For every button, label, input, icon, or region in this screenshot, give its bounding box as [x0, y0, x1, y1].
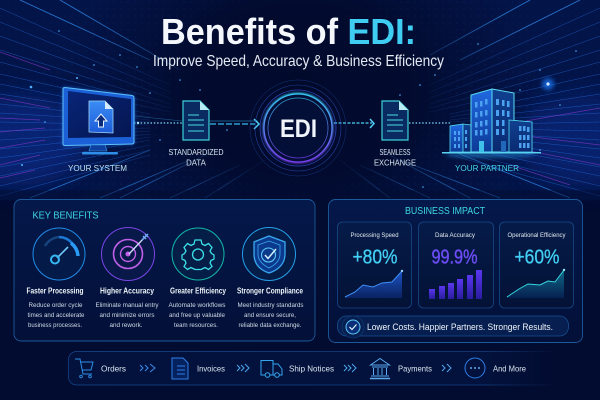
card label: Processing Speed — [350, 232, 399, 239]
EDI label: EDI — [280, 115, 317, 143]
icon: cart wheels — [80, 375, 91, 378]
title: Faster Processing — [26, 286, 84, 296]
description: Automate workflows — [168, 302, 226, 309]
benefit: faster processing — [26, 228, 85, 329]
label: your partner: YOUR PARTNER — [455, 163, 519, 173]
card: operational efficiency — [500, 222, 574, 308]
description: and minimize errors — [100, 312, 155, 319]
benefit: greater efficiency — [168, 228, 227, 329]
description: team resources. — [174, 322, 218, 329]
card: data accuracy — [418, 222, 494, 308]
icon: your system monitor — [63, 87, 134, 154]
label: invoices: Invoices — [197, 364, 225, 374]
EDI hub — [250, 80, 346, 176]
icon: target — [102, 228, 154, 280]
document types bar — [68, 352, 558, 385]
panel: key benefits — [14, 200, 315, 341]
description: and rework. — [110, 322, 143, 329]
label: seamless exchange: SEAMLESS — [380, 148, 410, 157]
data flow arrows — [134, 116, 450, 129]
label: seamless exchange: EXCHANGE — [374, 158, 416, 168]
description — [28, 302, 85, 329]
label: ship notices: Ship Notices — [289, 364, 334, 374]
benefit: stronger compliance — [237, 228, 304, 329]
description — [168, 302, 226, 329]
heading: business impact: BUSINESS IMPACT — [405, 206, 485, 217]
icon: invoice — [172, 358, 188, 379]
icon: bank — [370, 358, 390, 378]
label: payments: Payments — [398, 364, 432, 374]
panel: business impact — [328, 200, 582, 342]
description: Meet industry standards — [238, 302, 304, 309]
description: business processes. — [28, 322, 82, 329]
label: orders: Orders — [101, 364, 126, 374]
description: and free up valuable — [169, 312, 225, 319]
label: your system: YOUR SYSTEM — [68, 163, 127, 173]
description: Reduce order cycle — [28, 302, 83, 309]
icon: partner buildings — [442, 89, 541, 158]
label: standardized data — [168, 148, 224, 168]
description: and ensure secure, — [244, 312, 296, 319]
line chart — [507, 269, 565, 298]
title: Higher Accuracy — [100, 286, 155, 296]
area chart — [345, 270, 403, 298]
bar chart — [429, 270, 482, 299]
title: Benefits of EDI: — [161, 11, 416, 52]
metric: +80% — [352, 246, 398, 268]
label: standardized data: STANDARDIZED — [168, 148, 224, 157]
subtitle: Improve Speed, Accuracy & Business Efficiency — [153, 53, 444, 70]
icon: standardized data document — [183, 101, 209, 140]
icon: more — [465, 358, 485, 378]
card: processing speed — [338, 222, 412, 308]
icon: cart — [75, 359, 93, 374]
title: Greater Efficiency — [170, 286, 227, 296]
metric: 99.9% — [432, 246, 478, 268]
icon: shield — [242, 228, 296, 280]
arrow: chevrons — [140, 364, 155, 372]
description — [238, 302, 304, 329]
title: Stronger Compliance — [237, 286, 304, 296]
description — [96, 302, 159, 329]
callout: results — [338, 316, 568, 338]
description: reliable data exchange. — [238, 322, 302, 329]
description: Eliminate manual entry — [96, 302, 159, 309]
description: times and accelerate — [28, 312, 85, 319]
label: and more: And More — [493, 364, 526, 374]
icon: speedometer — [33, 228, 85, 280]
label: standardized data: DATA — [186, 158, 207, 168]
arrow: chevrons — [237, 364, 249, 372]
arrow: chevrons — [344, 364, 356, 372]
card label: Data Accuracy — [435, 232, 476, 239]
benefit: higher accuracy — [96, 228, 159, 329]
callout text: Lower Costs. Happier Partners. Stronger Results. — [367, 322, 553, 332]
label: seamless exchange — [374, 148, 416, 168]
metric: +60% — [514, 246, 560, 268]
arrow: chevrons — [442, 364, 451, 372]
icon: truck — [261, 360, 282, 377]
icon: seamless exchange document — [382, 101, 408, 140]
icon: gear — [172, 228, 224, 280]
heading: key benefits: KEY BENEFITS — [32, 210, 99, 222]
card label: Operational Efficiency — [508, 232, 566, 239]
